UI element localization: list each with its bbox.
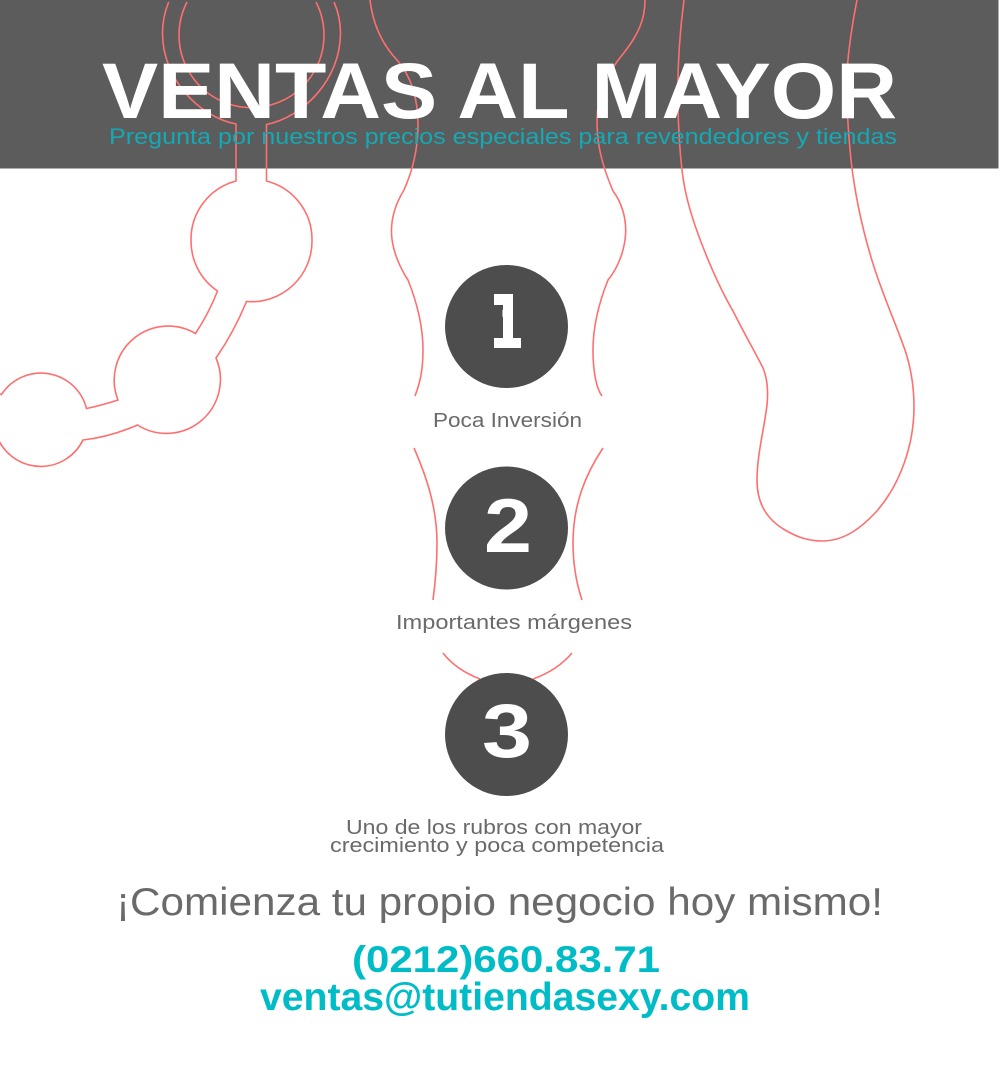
step 3 number: 3 (482, 689, 532, 774)
step 1: 1 (501, 291, 514, 368)
outline: central figure (370, 0, 645, 679)
step 3 label: crecimiento y poca competencia (330, 835, 665, 857)
outline: string of beads (0, 2, 340, 466)
step 2 number: 2 (484, 484, 532, 569)
step 1 (433, 265, 582, 432)
subtitle: Pregunta por nuestros precios especiales para revendedores y tiendas (109, 124, 897, 149)
step 2 label: Importantes márgenes (396, 612, 632, 634)
step 3 badge (445, 673, 568, 796)
step 1 badge (445, 265, 568, 388)
step 3 label (330, 817, 665, 857)
outline: curved figure at right (678, 0, 914, 541)
header banner (0, 0, 998, 168)
step 2 badge (445, 466, 568, 590)
title: VENTAS AL MAYOR (102, 46, 897, 135)
decorative line drawings (0, 0, 914, 679)
step 1 label: Poca Inversión (433, 410, 582, 432)
phone number: (0212)660.83.71 (352, 939, 660, 980)
step 3 label: Uno de los rubros con mayor (346, 817, 642, 839)
step 3 (330, 673, 665, 857)
step 2 (396, 466, 632, 634)
email address: ventas@tutiendasexy.com (260, 976, 750, 1019)
step 1 number (494, 291, 521, 368)
call to action: ¡Comienza tu propio negocio hoy mismo! (116, 881, 883, 924)
